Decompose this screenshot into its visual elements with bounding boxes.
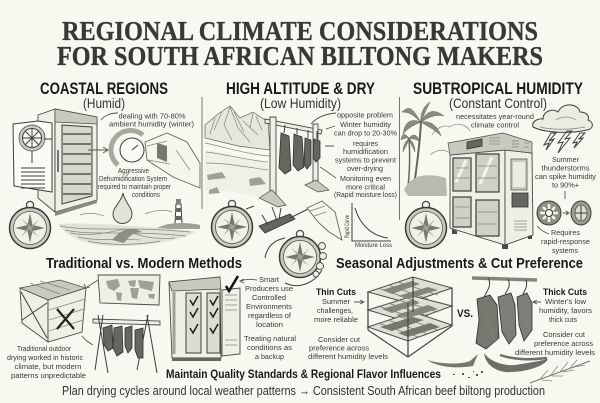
heading: traditional vs modern: Traditional vs. Modern Methods bbox=[46, 255, 242, 272]
heading: subtropical humidity: (Constant Control) bbox=[449, 95, 547, 111]
text: thin cuts bbox=[308, 287, 388, 361]
icon: dehumidifier cabinet bbox=[38, 109, 97, 216]
callout: thunderstorms: can spike humidity bbox=[535, 172, 596, 181]
callout: humidity: dealing with 70-80% bbox=[118, 112, 186, 120]
text: thick cuts: Consider cut bbox=[543, 330, 586, 339]
text: dehumidification: Aggressive bbox=[118, 166, 149, 175]
icon: mountains bbox=[205, 106, 270, 198]
text: thick cuts: different humidity levels bbox=[515, 348, 595, 357]
callout: thunderstorms bbox=[535, 155, 596, 199]
text: thin cuts: more reliable bbox=[314, 315, 358, 324]
panel: high altitude and dry bbox=[205, 80, 397, 286]
text: thick cuts: humidity, favors bbox=[539, 306, 592, 315]
callouts: high altitude notes bbox=[311, 110, 397, 199]
callout: smart producers: Smart bbox=[259, 275, 280, 284]
callouts: high altitude notes: (Rapid moisture loss) bbox=[334, 190, 397, 199]
icon: lighthouse bbox=[157, 199, 200, 229]
callouts: high altitude notes: Winter humidity bbox=[340, 120, 391, 129]
icon: hanging biltong rack bbox=[259, 117, 329, 207]
callouts: high altitude notes: opposite problem bbox=[337, 110, 393, 120]
text: traditional drying: patterns unpredictable bbox=[11, 371, 86, 380]
panel: traditional vs modern bbox=[7, 255, 296, 380]
callout: smart producers: Treating natural bbox=[244, 334, 296, 343]
text: dehumidification: required to maintain proper bbox=[98, 182, 171, 191]
callouts: high altitude notes: humidification bbox=[343, 147, 388, 156]
icon: controlled cabinet with checks bbox=[169, 276, 240, 361]
callout: humidity bbox=[101, 112, 194, 128]
callout: smart producers: conditions as bbox=[247, 343, 292, 352]
callouts: high altitude notes: more critical bbox=[346, 182, 385, 192]
text: thin cuts: challenges, bbox=[317, 306, 353, 315]
callout: smart producers: Environments bbox=[246, 302, 292, 311]
heading: coastal regions bbox=[40, 80, 168, 111]
icon: climate cabinet bbox=[448, 133, 533, 249]
callout: smart producers bbox=[240, 275, 296, 361]
chart: moisture curve: Rapid Curve bbox=[344, 215, 351, 238]
text: thin cuts: Summer bbox=[322, 297, 350, 306]
callout: rapid response: rapid-response bbox=[541, 237, 590, 246]
heading: coastal regions: (Humid) bbox=[83, 95, 125, 111]
text: thick cuts: preference across bbox=[534, 339, 593, 348]
callout: year-round: necessitates year-round bbox=[456, 112, 534, 121]
callout: rapid response bbox=[537, 226, 590, 255]
icon: water drop bbox=[113, 193, 132, 224]
title: FOR SOUTH AFRICAN BILTONG MAKERS bbox=[57, 40, 543, 71]
icon: moisture meter on meat bbox=[246, 201, 342, 240]
icon: traditional drying rack bbox=[82, 315, 160, 373]
callout: humidity: ambient humidity (winter) bbox=[109, 120, 194, 128]
text: thin cuts: Consider cut bbox=[318, 335, 361, 344]
heading: coastal regions: COASTAL REGIONS bbox=[40, 80, 168, 98]
callout: thunderstorms: Summer bbox=[552, 155, 579, 164]
callout: smart producers: regardless of bbox=[248, 311, 292, 320]
heading: high altitude: (Low Humidity) bbox=[260, 95, 341, 111]
callout: thunderstorms: to 90%+ bbox=[552, 180, 580, 190]
icon: hanging thick cuts bbox=[472, 278, 537, 349]
callout: smart producers: a backup bbox=[255, 352, 284, 361]
icon: dial and hand bbox=[111, 130, 200, 188]
chart: moisture curve: Moisture Loss bbox=[355, 242, 393, 249]
text: thick cuts: thick cuts bbox=[549, 315, 577, 324]
panel: seasonal adjustments bbox=[308, 255, 595, 383]
callout: year-round: climate control bbox=[471, 120, 519, 130]
text: thin cuts: Thin Cuts bbox=[316, 287, 356, 298]
icon: compass inland bbox=[212, 200, 252, 248]
icon: compass coastal bbox=[10, 201, 50, 248]
callouts: high altitude notes: requires bbox=[353, 139, 378, 148]
text: traditional drying: drying worked in historic bbox=[7, 353, 83, 362]
arrow bbox=[84, 280, 98, 288]
chart: moisture curve bbox=[344, 203, 393, 249]
footer heading: quality standards: Maintain Quality Standards & Regional Flavor Influences bbox=[166, 367, 441, 381]
icon: storm cloud bbox=[533, 105, 592, 153]
text: thin cuts: different humidity levels bbox=[308, 352, 388, 361]
callouts: high altitude notes: Monitoring even bbox=[340, 174, 391, 183]
callout: year-round bbox=[456, 112, 534, 130]
icon: sea waves bbox=[58, 210, 196, 246]
icon: fan wheels bbox=[537, 201, 591, 225]
text: traditional drying: climate, but modern bbox=[14, 362, 82, 371]
panel: coastal regions bbox=[10, 80, 200, 248]
callouts: high altitude notes: over-drying bbox=[347, 164, 383, 173]
panel: subtropical humidity bbox=[401, 80, 596, 255]
icon: fan and coil panel bbox=[13, 121, 52, 192]
callout: rapid response: Requires bbox=[551, 228, 580, 237]
text: thin cuts: preference across bbox=[309, 344, 369, 352]
text: traditional drying bbox=[7, 344, 86, 380]
icon: crossed-out crate bbox=[20, 280, 86, 342]
callouts: high altitude notes: can drop to 20-30% bbox=[334, 128, 397, 138]
text: thick cuts bbox=[515, 287, 595, 357]
text: thick cuts: Winter's low bbox=[545, 297, 587, 306]
heading: high altitude bbox=[226, 80, 375, 111]
callout: smart producers: Controlled bbox=[252, 293, 286, 302]
text: thick cuts: Thick Cuts bbox=[543, 287, 587, 298]
text: dehumidification: Dehumidification System bbox=[99, 174, 167, 183]
text: dehumidification: conditions bbox=[132, 190, 160, 199]
text: dehumidification bbox=[98, 166, 171, 199]
callout: thunderstorms: thunderstorms bbox=[542, 164, 590, 172]
callout: rapid response: systems bbox=[552, 246, 578, 255]
icon: compass regional bbox=[406, 201, 446, 248]
arrow bbox=[88, 147, 108, 153]
label: versus: VS. bbox=[457, 308, 473, 320]
title bbox=[57, 15, 543, 71]
text: traditional drying: Traditional outdoor bbox=[17, 344, 71, 353]
icon: world map bbox=[98, 275, 160, 305]
callout: smart producers: location bbox=[256, 320, 283, 329]
title: REGIONAL CLIMATE CONSIDERATIONS bbox=[62, 15, 538, 46]
icon: compass in hand bbox=[265, 230, 326, 286]
heading: high altitude: HIGH ALTITUDE & DRY bbox=[226, 80, 375, 98]
icon: chili peppers and herbs bbox=[427, 353, 590, 383]
icon: drying rack with thin cuts bbox=[368, 277, 452, 357]
callouts: high altitude notes: systems to prevent bbox=[335, 156, 397, 164]
heading: subtropical humidity bbox=[413, 80, 583, 111]
callout: smart producers: Producers use bbox=[245, 284, 293, 293]
icon: palm trees bbox=[401, 102, 470, 196]
